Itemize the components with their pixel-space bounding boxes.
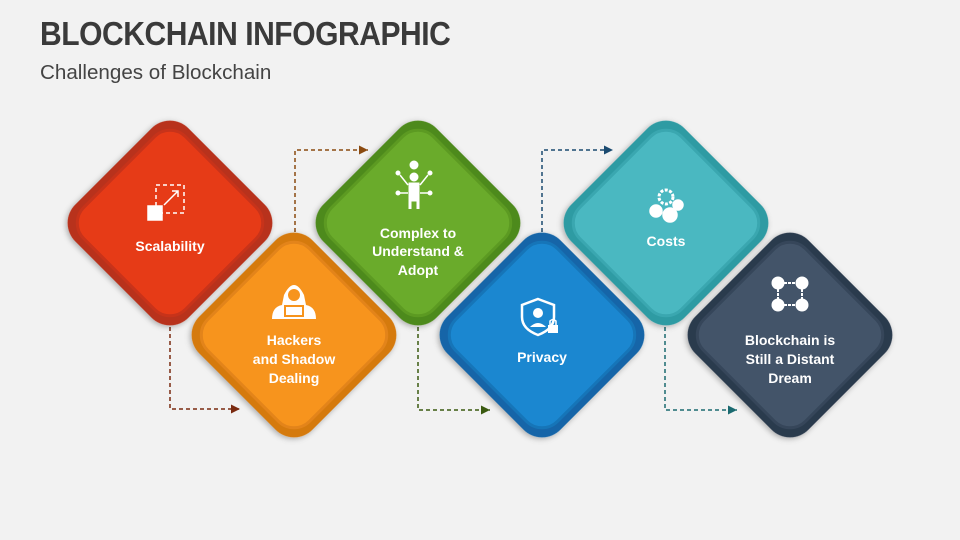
panel: complex: Understand & xyxy=(372,243,464,259)
icon: hacker xyxy=(272,285,316,319)
panel: hackers xyxy=(181,222,407,448)
panel: distant dream xyxy=(677,222,903,448)
label: Costs xyxy=(647,233,686,249)
title: BLOCKCHAIN INFOGRAPHIC xyxy=(40,15,450,52)
label: Hackers xyxy=(267,332,321,348)
panel: hackers: and Shadow xyxy=(253,351,335,367)
arrow: scalability to hackers xyxy=(170,327,240,409)
label: Blockchain is xyxy=(745,332,835,348)
panel: scalability xyxy=(57,110,283,336)
arrow: costs to dream xyxy=(665,327,737,410)
label: Complex to xyxy=(380,225,456,241)
panel: distant dream: Still a Distant xyxy=(746,351,835,367)
panel: hackers: Dealing xyxy=(269,370,319,386)
arrow: complex to privacy xyxy=(418,327,490,410)
icon: coins gear xyxy=(650,190,683,222)
icon: scale xyxy=(148,185,184,220)
subtitle: Challenges of Blockchain xyxy=(40,62,271,84)
label: Privacy xyxy=(517,349,567,365)
icon: chain network xyxy=(772,277,808,311)
icon: person with ideas xyxy=(396,161,432,209)
label: Scalability xyxy=(135,238,205,254)
panel: costs xyxy=(553,110,779,336)
arrow: hackers to complex xyxy=(295,150,368,232)
arrow: privacy to costs xyxy=(542,150,613,232)
panel: complex xyxy=(305,110,531,336)
panel: distant dream: Dream xyxy=(768,370,812,386)
panel: complex: Adopt xyxy=(398,262,439,278)
panel: privacy xyxy=(429,222,655,448)
icon: shield lock xyxy=(522,299,558,335)
